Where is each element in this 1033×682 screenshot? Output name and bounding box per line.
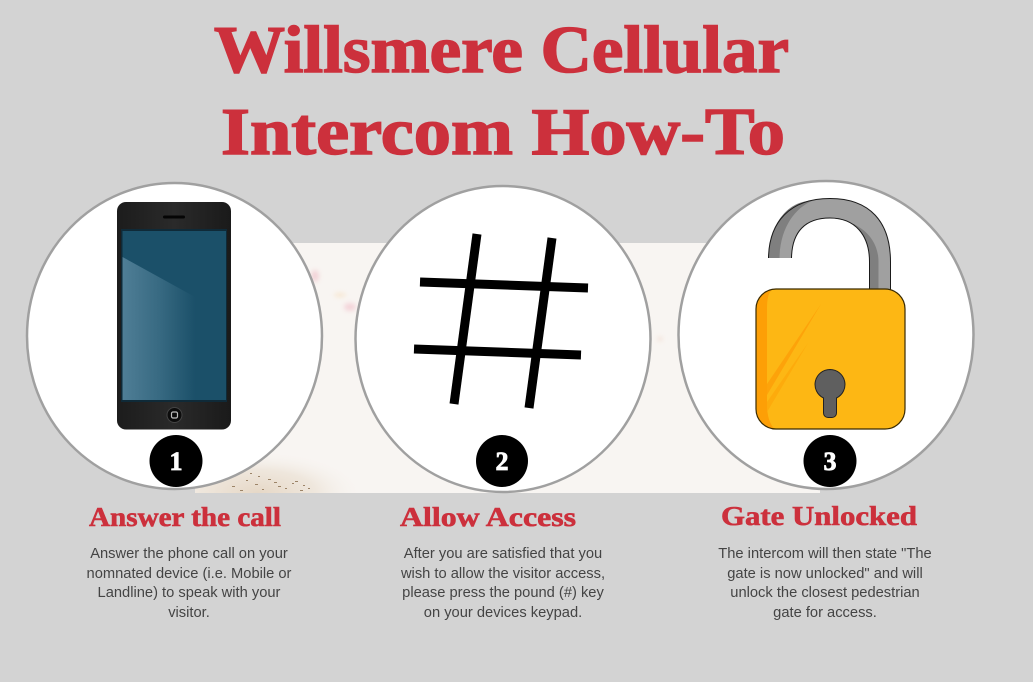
text: step 2 description: on your devices keypad. [424, 605, 582, 621]
text: step 1 description: visitor. [168, 605, 210, 621]
text: step 1 description: Landline) to speak with your [98, 585, 281, 601]
text: step 2 description: wish to allow the visitor access, [400, 566, 605, 582]
text: step 2 description: After you are satisfied that you [404, 546, 602, 562]
badge: number 2: 2 [496, 447, 508, 476]
text: step 2 description: please press the pound (#) key [402, 585, 604, 601]
panel: step 3 circle [678, 181, 974, 489]
text: step 1 description [87, 546, 292, 621]
badge: number 1 [150, 435, 202, 487]
heading: allow access: Allow Access [400, 502, 576, 532]
badge: number 1: 1 [170, 447, 182, 476]
icon: open padlock [756, 198, 905, 429]
heading: gate unlocked: Gate Unlocked [721, 501, 917, 531]
text: step 2 description [400, 546, 605, 621]
panel: step 2 circle [356, 186, 650, 492]
text: step 3 description [718, 546, 932, 621]
text: step 3 description: gate is now unlocked" and will [727, 566, 923, 582]
panel: step 1 circle [27, 183, 322, 489]
badge: number 3 [804, 435, 856, 487]
text: step 3 description: The intercom will then state "The [718, 546, 932, 562]
text: step 3 description: unlock the closest pedestrian [730, 585, 920, 601]
text: step 3 description: gate for access. [773, 605, 877, 621]
badge: number 3: 3 [824, 447, 836, 476]
icon: mobile phone [117, 202, 231, 430]
badge: number 2 [476, 435, 528, 487]
title: Intercom How-To [221, 95, 785, 169]
icon: pound key symbol [414, 234, 588, 408]
heading: answer the call: Answer the call [89, 502, 282, 532]
textured background band [195, 243, 820, 493]
title [214, 13, 789, 169]
title: Willsmere Cellular [214, 13, 789, 87]
text: step 1 description: Answer the phone call on your [90, 546, 288, 562]
text: step 1 description: nomnated device (i.e. Mobile or [87, 566, 292, 582]
